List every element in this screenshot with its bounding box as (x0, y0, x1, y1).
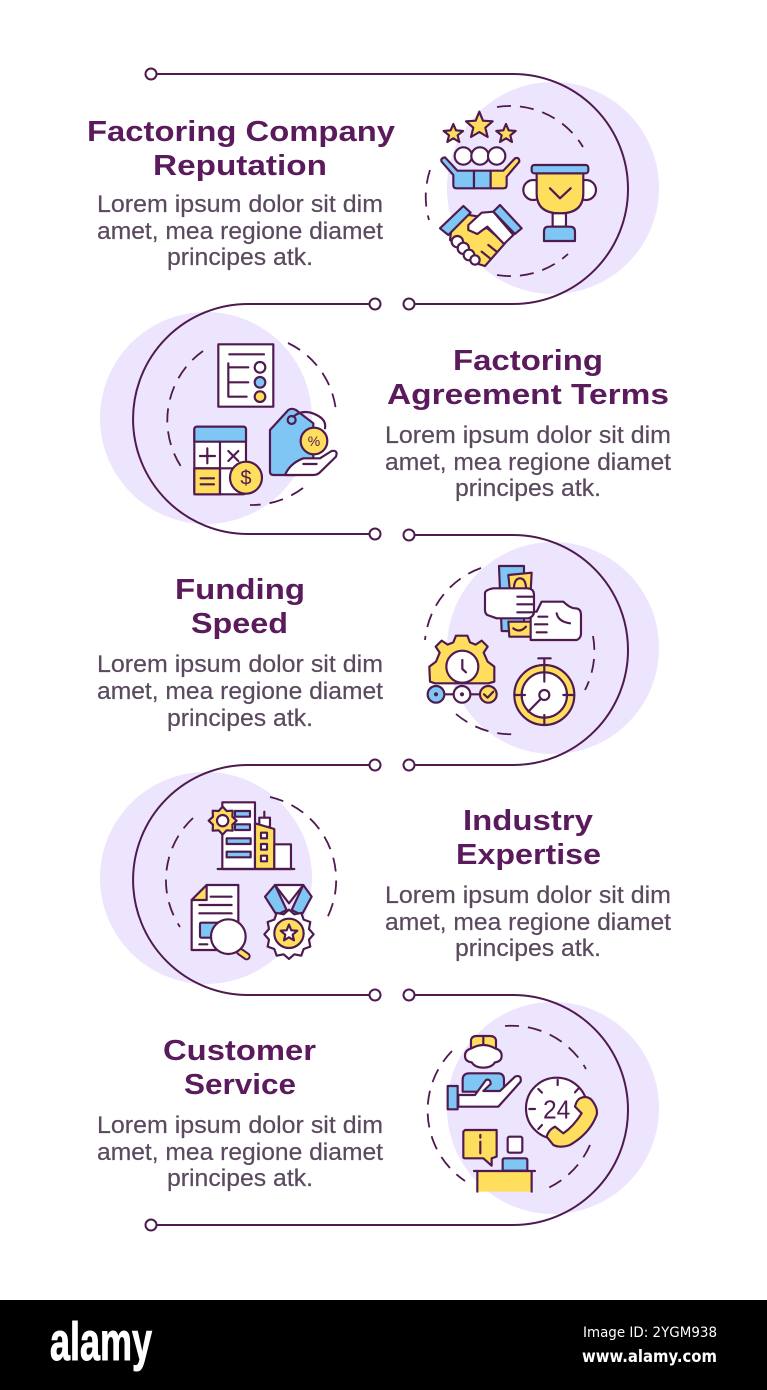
icon: support agent, 24 hour phone and info desk: 24 (543, 1094, 570, 1124)
heading: Agreement Terms (387, 379, 669, 411)
heading: Customer (163, 1035, 316, 1067)
body text: principes atk. (455, 935, 601, 962)
body text: amet, mea regione diamet (385, 449, 671, 476)
icon: agreement document, calculator and price tag: $ (240, 468, 252, 490)
connector line (404, 530, 628, 770)
heading: Factoring Company (87, 116, 395, 148)
heading: Service (184, 1069, 296, 1101)
heading: Factoring (453, 345, 603, 377)
body text: Lorem ipsum dolor sit dim (385, 422, 671, 449)
heading: Reputation (153, 150, 327, 182)
body text (97, 191, 383, 271)
body text: Lorem ipsum dolor sit dim (385, 882, 671, 909)
icon: reputation, trophy and handshake (440, 112, 596, 266)
connector line (133, 760, 380, 1000)
heading (163, 1035, 316, 1101)
heading (387, 345, 669, 411)
body text: principes atk. (455, 475, 601, 502)
body text (97, 1112, 383, 1192)
dashed ring (426, 106, 583, 276)
website: www.alamy.com (582, 1347, 717, 1367)
dashed ring (167, 343, 336, 505)
image id: Image ID: 2YGM938 (583, 1325, 717, 1341)
lilac background circle (447, 542, 659, 754)
body text: amet, mea regione diamet (97, 218, 383, 245)
body text: amet, mea regione diamet (385, 909, 671, 936)
lilac background circle (447, 82, 659, 294)
body text: amet, mea regione diamet (97, 1139, 383, 1166)
heading: Funding (175, 574, 305, 606)
panel: factoring agreement terms (100, 298, 671, 540)
body text: principes atk. (167, 705, 313, 732)
body text: Lorem ipsum dolor sit dim (97, 651, 383, 678)
body text: amet, mea regione diamet (97, 678, 383, 705)
dashed ring (166, 797, 336, 927)
footer bar (0, 1300, 767, 1390)
heading (456, 805, 601, 871)
body text (385, 422, 671, 502)
icon: buildings, document search and medal (192, 802, 314, 959)
panel: funding speed (97, 530, 659, 770)
panel: industry expertise (100, 760, 671, 1000)
panel: customer service (97, 990, 659, 1230)
body text (385, 882, 671, 962)
alamy logo: alamy (50, 1312, 152, 1372)
heading (175, 574, 305, 640)
heading (87, 116, 395, 182)
connector line (133, 298, 380, 540)
heading: Speed (191, 608, 288, 640)
connector line (146, 68, 628, 310)
panel: factoring company reputation (87, 68, 659, 310)
body text (97, 651, 383, 732)
dashed ring (428, 1026, 590, 1188)
icon: agreement document, calculator and price tag: % (308, 433, 320, 449)
icon: cash handover, gear clock and stopwatch (428, 566, 581, 725)
lilac background circle (447, 1002, 659, 1214)
heading: Industry (463, 805, 593, 837)
lilac background circle (100, 312, 312, 524)
connector line (146, 990, 628, 1230)
dashed ring (425, 568, 594, 734)
body text: principes atk. (167, 1165, 313, 1192)
body text: Lorem ipsum dolor sit dim (97, 1112, 383, 1139)
body text: principes atk. (167, 244, 313, 271)
lilac background circle (100, 772, 312, 984)
icon: support agent, 24 hour phone and info desk (448, 1036, 597, 1192)
body text: Lorem ipsum dolor sit dim (97, 191, 383, 218)
icon: agreement document, calculator and price tag (194, 344, 337, 494)
heading: Expertise (456, 839, 601, 871)
